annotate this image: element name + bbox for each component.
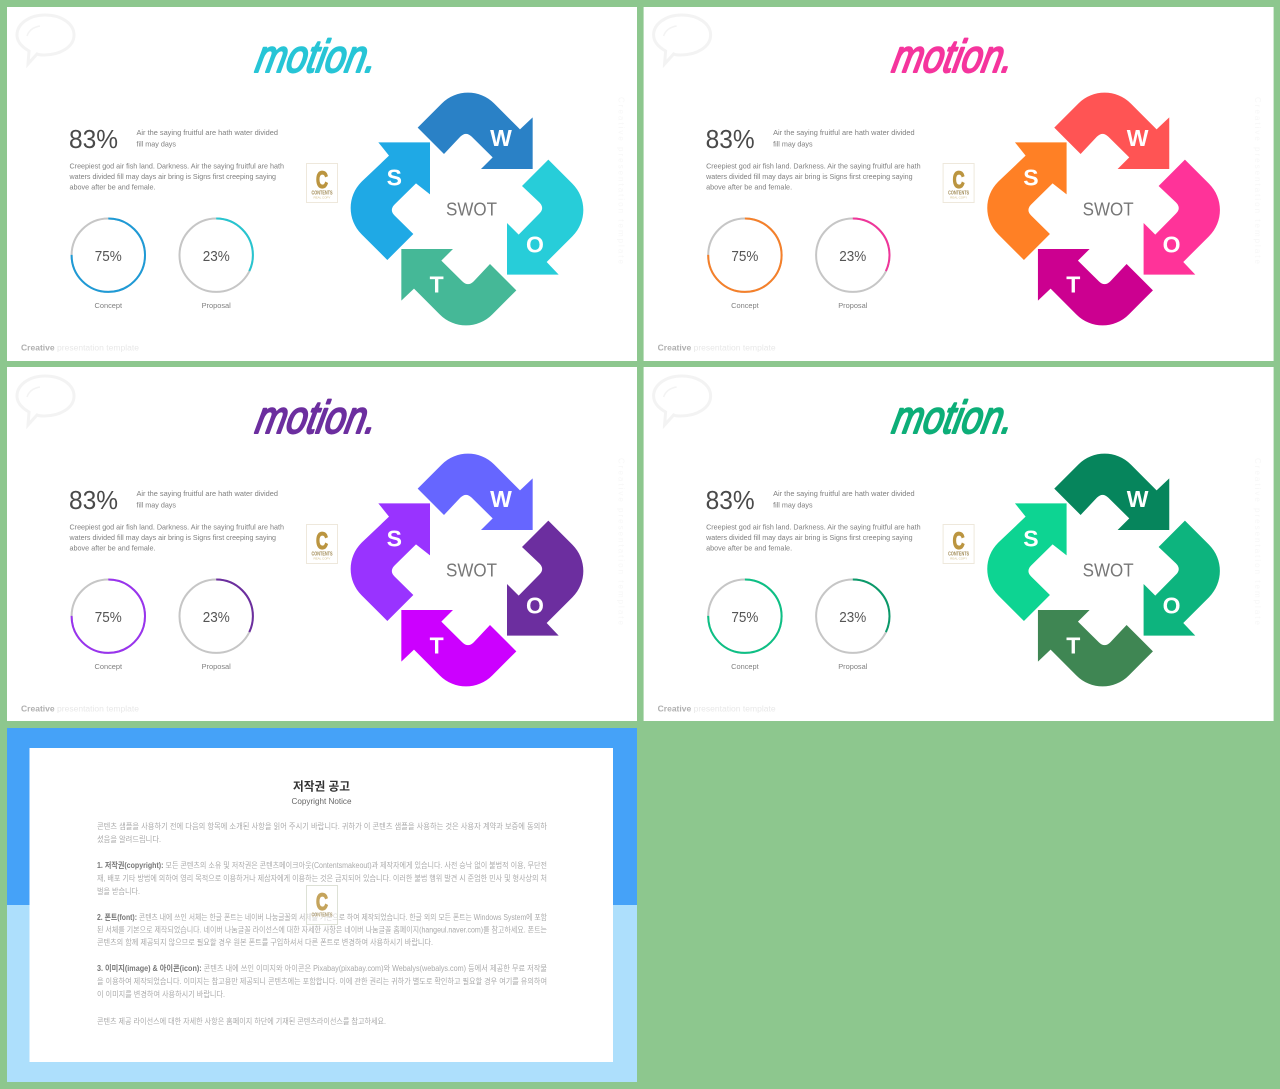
chart: ring 23% Proposal: 23% — [839, 610, 866, 626]
diagram: SWOT arrows: W — [490, 486, 512, 512]
chart: ring 23% Proposal — [816, 218, 890, 310]
text: stat description — [773, 489, 915, 510]
title: motion: motion. — [888, 30, 1019, 82]
text: stat description: fill may days — [136, 500, 176, 510]
stat: 83%: 83% — [706, 487, 755, 515]
chart: ring 75% Concept — [708, 218, 782, 310]
diagram: SWOT arrows: O — [526, 592, 544, 618]
footer: Creative presentation template — [21, 704, 140, 714]
chart: ring 75% Concept — [72, 218, 145, 310]
chart: ring 75% Concept: Concept — [731, 662, 759, 671]
diagram: SWOT arrows: S — [1023, 164, 1039, 190]
diagram: SWOT arrows: W — [1127, 125, 1149, 151]
chart: ring 23% Proposal: Proposal — [202, 301, 231, 310]
text: paragraph — [705, 162, 921, 192]
diagram: SWOT arrows: T — [1066, 632, 1080, 658]
logo — [306, 164, 338, 202]
text: paragraph: waters divided fill may days air bring is Signs first creeping saying — [69, 172, 276, 181]
chart: ring 75% Concept: 75% — [731, 249, 758, 265]
icon: speech bubble — [654, 376, 711, 425]
diagram: SWOT arrows: T — [430, 272, 444, 298]
logo: REAL COPY — [950, 196, 967, 200]
logo: C — [316, 528, 328, 555]
text: section 2 font: 된 서체를 기본으로 제작되었습니다. 네이버 나눔글꼴 라이선스에 대한 자세한 사항은 네이버 나눔글꼴 홈페이지(hangeul.naver.com)를 참고하세요. 폰트는 — [97, 924, 547, 934]
text: section 2 font: 콘텐츠의 함께 제공되지 않으므로 필요할 경우 원본 폰트를 구입하셔서 다른 폰트로 변경하여 사용하시기 바랍니다. — [97, 937, 433, 947]
vertical side text: Creative presentation template — [616, 458, 626, 627]
text: paragraph: above after be and female. — [70, 544, 156, 552]
diagram: SWOT arrows: SWOT — [446, 560, 497, 580]
heading: 저작권 공고 — [293, 778, 350, 794]
text: section 3 image and icon — [97, 963, 547, 999]
text: section 3 image and icon: 을 이용하여 제작되었습니다. 이미지는 참고용만 제공되니 콘텐츠에는 포함합니다. 이에 관한 권리는 귀하가 별도로 확인하고 필요할 경우 여기를 유의하여 — [97, 976, 547, 986]
logo: CONTENTS — [312, 552, 333, 558]
vertical side text: Creative presentation template — [1253, 458, 1262, 627]
diagram: SWOT arrows: O — [526, 232, 544, 258]
icon: speech bubble — [17, 15, 74, 64]
footer: Creative presentation template — [658, 344, 776, 352]
logo — [306, 886, 338, 924]
text: closing note: 콘텐츠 제공 라이선스에 대한 자세한 사항은 홈페이지 하단에 기재된 콘텐츠라이선스를 참고하세요. — [97, 1016, 386, 1026]
text: section 1 copyright: 재, 배포 기타 방법에 의하여 영리 목적으로 이용하거나 제삼자에게 이용하는 것은 금지되어 있습니다. 이러한 불법 행위 발견 시 준엄한 민사 및 형사상의 처 — [97, 873, 547, 883]
text: stat description: fill may days — [136, 140, 176, 148]
footer: Creative presentation template — [658, 704, 776, 714]
logo: REAL COPY — [950, 556, 967, 560]
title: motion: motion. — [252, 391, 383, 443]
chart: ring 75% Concept: Concept — [95, 301, 122, 310]
panel: copyright notice — [7, 728, 637, 1082]
chart: ring 75% Concept — [72, 580, 145, 671]
text: paragraph: Creepiest god air fish land. Darkness. Air the saying fruitful are hath — [70, 522, 284, 532]
diagram: SWOT arrows: S — [387, 526, 402, 552]
panel: green SWOT slide — [644, 367, 1274, 721]
logo: CONTENTS — [312, 912, 333, 918]
logo: C — [316, 167, 328, 194]
stat: 83%: 83% — [69, 487, 118, 515]
text: intro — [97, 821, 548, 844]
text: section 3 image and icon: 이 이미지를 변경하여 사용하시기 바랍니다. — [97, 989, 225, 999]
diagram: SWOT arrows: SWOT — [1083, 200, 1134, 220]
subheading: Copyright Notice — [292, 796, 352, 806]
text: stat description — [136, 128, 278, 148]
diagram: SWOT arrows — [987, 93, 1220, 325]
text: paragraph: above after be and female. — [706, 544, 792, 552]
panel: pink SWOT slide — [644, 7, 1274, 361]
logo: C — [316, 889, 328, 916]
diagram: SWOT arrows — [351, 454, 583, 686]
title: motion: motion. — [888, 391, 1019, 443]
text: section 3 image and icon: 3. 이미지(image) & 아이콘(icon): 콘텐츠 내에 쓰인 이미지와 아이콘은 Pixabay(pixabay.com)와 Webalys(webalys.com) 등에서 제공한 무료 저작물 — [97, 963, 547, 973]
chart: ring 23% Proposal: 23% — [203, 249, 230, 265]
text: paragraph: waters divided fill may days air bring is Signs first creeping saying — [705, 533, 913, 542]
chart: ring 75% Concept: Concept — [95, 662, 122, 671]
text: stat description: Air the saying fruitful are hath water divided — [773, 128, 915, 137]
logo: C — [953, 167, 965, 194]
logo — [943, 164, 974, 202]
diagram: SWOT arrows: T — [1066, 272, 1080, 298]
panel: purple SWOT slide — [7, 367, 637, 721]
chart: ring 23% Proposal — [816, 580, 890, 671]
logo: CONTENTS — [312, 190, 333, 196]
chart: ring 75% Concept — [708, 580, 782, 671]
diagram: SWOT arrows — [987, 454, 1220, 686]
text: stat description: fill may days — [773, 500, 813, 510]
diagram: SWOT arrows: SWOT — [446, 200, 497, 220]
text: paragraph — [705, 522, 921, 552]
text: paragraph: waters divided fill may days air bring is Signs first creeping saying — [69, 533, 276, 542]
diagram: SWOT arrows: T — [430, 632, 444, 658]
chart: ring 23% Proposal: 23% — [203, 610, 230, 626]
footer: Creative presentation template — [21, 344, 140, 352]
chart: ring 23% Proposal: 23% — [839, 249, 866, 265]
logo: REAL COPY — [313, 556, 331, 560]
chart: ring 23% Proposal: Proposal — [838, 301, 868, 310]
icon: speech bubble — [17, 376, 74, 425]
stat: 83%: 83% — [706, 126, 755, 154]
diagram: SWOT arrows: O — [1163, 592, 1181, 618]
icon: speech bubble — [654, 15, 711, 64]
logo: C — [953, 528, 965, 555]
text: intro: 셨음을 알려드립니다. — [97, 834, 161, 844]
text: stat description: Air the saying fruitful are hath water divided — [773, 489, 915, 498]
diagram: SWOT arrows: W — [490, 125, 512, 151]
logo: REAL COPY — [313, 196, 331, 200]
chart: ring 23% Proposal — [180, 218, 253, 310]
panel: cyan SWOT slide — [7, 7, 637, 361]
logo — [943, 524, 974, 564]
text: paragraph: Creepiest god air fish land. Darkness. Air the saying fruitful are hath — [706, 162, 921, 170]
diagram: SWOT arrows: S — [1023, 526, 1039, 552]
chart: ring 23% Proposal: Proposal — [202, 662, 231, 671]
diagram: SWOT arrows: O — [1163, 232, 1181, 258]
text: paragraph: Creepiest god air fish land. Darkness. Air the saying fruitful are hath — [70, 162, 284, 170]
chart: ring 75% Concept: 75% — [731, 610, 758, 626]
text: paragraph: Creepiest god air fish land. Darkness. Air the saying fruitful are hath — [706, 522, 921, 532]
chart: ring 75% Concept: Concept — [731, 301, 759, 310]
text: stat description: Air the saying fruitful are hath water divided — [136, 128, 278, 137]
vertical side text: Creative presentation template — [616, 97, 626, 266]
text: stat description — [773, 128, 915, 148]
text: stat description: Air the saying fruitful are hath water divided — [136, 489, 278, 498]
diagram: SWOT arrows: W — [1127, 486, 1149, 512]
chart: ring 75% Concept: 75% — [95, 249, 122, 265]
text: section 1 copyright — [97, 860, 547, 896]
chart: ring 23% Proposal — [180, 580, 253, 671]
text: paragraph — [69, 522, 284, 552]
text: section 2 font: 2. 폰트(font): 콘텐츠 내에 쓰인 서체는 한글 폰트는 네이버 나눔글꼴의 서체를 기본으로 하여 제작되었습니다. 한글 외의 모든 폰트는 Windows System에 포함 — [97, 912, 548, 922]
text: paragraph: waters divided fill may days air bring is Signs first creeping saying — [705, 172, 913, 181]
logo — [306, 524, 338, 564]
diagram: SWOT arrows — [351, 93, 583, 325]
vertical side text: Creative presentation template — [1253, 97, 1262, 266]
text: intro: 콘텐츠 샘플을 사용하기 전에 다음의 항목에 소개된 사항을 읽어 주시기 바랍니다. 귀하가 이 콘텐츠 샘플을 사용하는 것은 사용자 계약과 보증에 동의하 — [97, 821, 548, 831]
diagram: SWOT arrows: SWOT — [1083, 560, 1134, 580]
text: paragraph: above after be and female. — [70, 182, 156, 192]
text: stat description: fill may days — [773, 140, 813, 148]
logo: CONTENTS — [948, 190, 970, 196]
title: motion: motion. — [252, 30, 383, 82]
text: stat description — [136, 489, 278, 510]
text: section 2 font — [97, 912, 548, 947]
logo: CONTENTS — [948, 552, 970, 558]
chart: ring 75% Concept: 75% — [95, 610, 122, 626]
diagram: SWOT arrows: S — [387, 164, 402, 190]
text: paragraph: above after be and female. — [706, 182, 792, 192]
chart: ring 23% Proposal: Proposal — [838, 662, 868, 671]
text: paragraph — [69, 162, 284, 192]
text: section 1 copyright: 1. 저작권(copyright): 모든 콘텐츠의 소유 및 저작권은 콘텐츠메이크아웃(Contentsmakeout)과 제작자에게 있습니다. 사전 승낙 없이 불법적 이용, 무단전 — [97, 860, 547, 870]
text: section 1 copyright: 벌을 받습니다. — [97, 886, 140, 896]
stat: 83%: 83% — [69, 126, 118, 154]
